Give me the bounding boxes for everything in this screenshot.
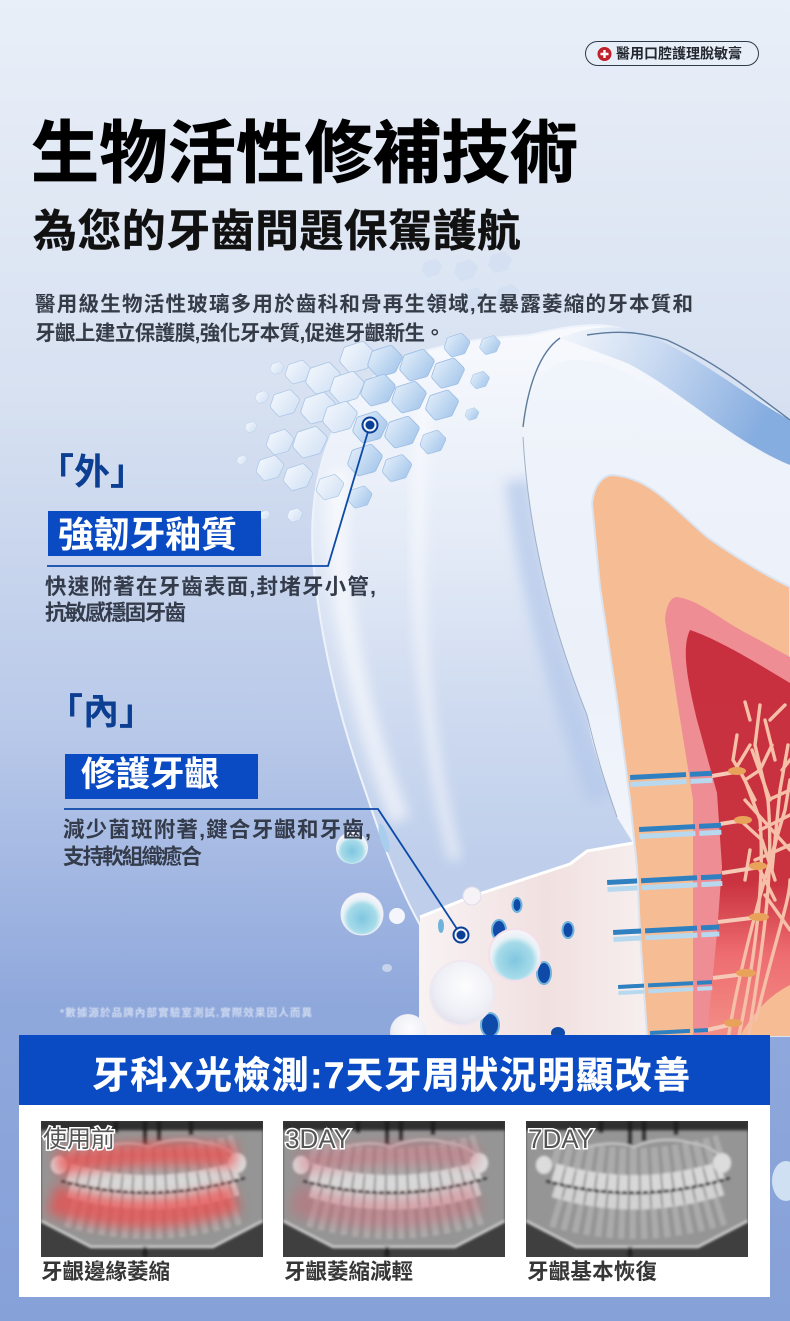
panel background bbox=[19, 1105, 770, 1297]
inner description bbox=[63, 818, 371, 869]
heading: inner bracket: 「內」 bbox=[47, 691, 155, 732]
outer description bbox=[45, 575, 376, 625]
captions: 牙齦邊緣萎縮 bbox=[41, 1259, 170, 1284]
x-ray: day 7 bbox=[526, 1121, 748, 1257]
upper right blue band bbox=[560, 327, 790, 465]
inner enamel cap bbox=[523, 360, 790, 843]
section: outer bbox=[38, 418, 378, 625]
dentin layer bbox=[592, 475, 790, 1036]
crown thin outlines bbox=[523, 332, 790, 427]
outer description: 快速附著在牙齒表面,封堵牙小管, bbox=[45, 575, 376, 599]
captions: 牙齦萎縮減輕 bbox=[284, 1259, 413, 1284]
leader line to hexagons bbox=[47, 418, 378, 566]
hexagon biomaterial cluster bbox=[236, 250, 522, 523]
inner description: 支持軟組織癒合 bbox=[63, 845, 202, 869]
gum pores bbox=[438, 898, 574, 1039]
captions bbox=[41, 1259, 657, 1284]
intro paragraph: 醫用級生物活性玻璃多用於齒科和骨再生領域,在暴露萎縮的牙本質和 bbox=[35, 292, 693, 316]
panel: x-ray results bbox=[19, 1035, 770, 1297]
footnote: *數據源於品牌內部實驗室測試,實際效果因人而異 bbox=[60, 1006, 312, 1019]
x-ray: day 3: 3DAY bbox=[285, 1124, 351, 1154]
badge: oral care: 醫用口腔護理脫敏膏 bbox=[616, 46, 742, 62]
banner: 牙科X光檢測:7天牙周狀況明顯改善 bbox=[92, 1055, 690, 1096]
x-ray: before bbox=[41, 1121, 263, 1257]
right edge bubble bbox=[772, 1161, 790, 1201]
label bar: strengthen enamel: 強韌牙釉質 bbox=[58, 514, 237, 555]
nerve stems and orange bulbs bbox=[707, 767, 769, 1030]
label bar: repair gums bbox=[65, 754, 258, 799]
x-ray: day 3 bbox=[283, 1121, 505, 1257]
icon: red cross bbox=[598, 47, 612, 61]
section: inner bbox=[47, 691, 468, 942]
gum and root tissue bbox=[420, 843, 650, 1036]
badge: oral care bbox=[586, 42, 758, 66]
leader line to gum bbox=[64, 809, 468, 942]
subtitle: 為您的牙齒問題保駕護航 bbox=[33, 207, 521, 256]
nerves bbox=[728, 702, 790, 1040]
intro paragraph: 牙齦上建立保護膜,強化牙本質,促進牙齦新生。 bbox=[35, 321, 445, 345]
bubbles bbox=[336, 822, 541, 1050]
outer description: 抗敏感穩固牙齒 bbox=[45, 600, 186, 625]
title: 生物活性修補技術 bbox=[31, 116, 578, 192]
illustration: tooth cross-section bbox=[312, 325, 790, 1040]
captions: 牙齦基本恢復 bbox=[527, 1260, 657, 1284]
label bar: repair gums: 修護牙齦 bbox=[81, 756, 219, 794]
heading: outer bracket: 「外」 bbox=[38, 451, 146, 492]
inner description: 減少菌斑附著,鍵合牙齦和牙齒, bbox=[63, 818, 371, 842]
intro paragraph bbox=[35, 292, 693, 345]
tooth outer glass shell bbox=[312, 325, 790, 1036]
banner bbox=[19, 1035, 770, 1105]
root end bbox=[740, 985, 790, 1036]
pulp core bbox=[686, 630, 790, 1036]
x-ray: day 7: 7DAY bbox=[528, 1124, 594, 1154]
pulp outer layer bbox=[665, 597, 790, 1036]
x-ray: before: 使用前 bbox=[43, 1126, 115, 1153]
dentinal tubules bbox=[607, 771, 722, 1035]
